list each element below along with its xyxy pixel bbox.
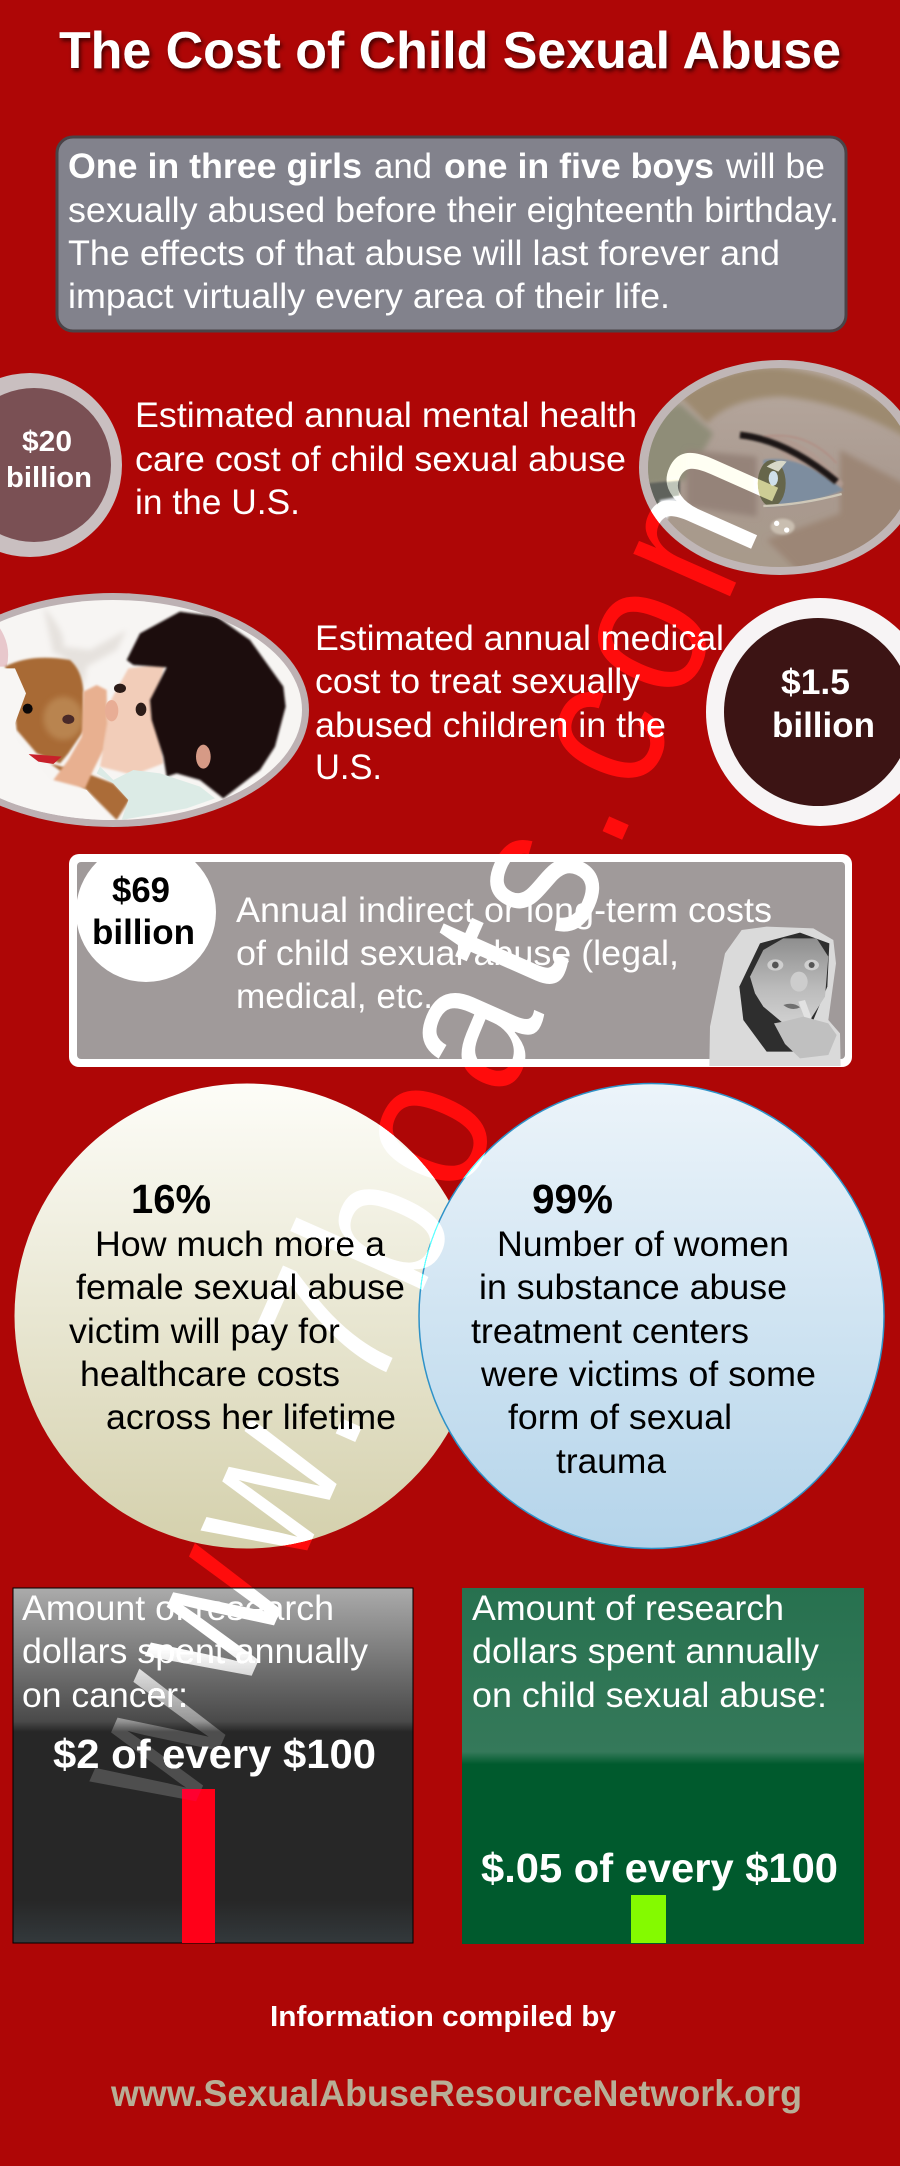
panel: cancer research dollars: [13, 1588, 413, 1943]
stat: $20 billion circle: [0, 373, 122, 557]
venn circle: 99%: in substance abuse: [479, 1268, 787, 1307]
panel: child sexual abuse research dollars: on child sexual abuse:: [472, 1676, 827, 1715]
stat: $1.5 billion circle: billion: [772, 706, 875, 745]
text: indirect cost: Annual indirect or long-term costs: [236, 891, 772, 930]
intro text: impact virtually every area of their life.: [68, 277, 670, 316]
venn circle: 16%: 16%: [131, 1176, 211, 1222]
venn circle: 99%: treatment centers: [471, 1312, 749, 1351]
intro text: [68, 147, 839, 316]
venn circle: 16%: [14, 1084, 480, 1548]
venn circle: 99%: 99%: [532, 1176, 613, 1222]
text: medical cost: abused children in the: [315, 706, 666, 745]
footer label: Information compiled by: [270, 2001, 616, 2033]
panel: intro statement: [57, 137, 846, 331]
text: mental health cost: in the U.S.: [135, 483, 300, 522]
venn circle: 16%: female sexual abuse: [76, 1268, 405, 1307]
intro text: will be: [725, 147, 825, 186]
text: mental health cost: care cost of child sexual abuse: [135, 440, 626, 479]
panel: cancer research dollars: dollars spent annually: [22, 1632, 368, 1671]
stat: $20 billion circle: $20: [22, 426, 72, 458]
intro text: One in three girls: [68, 147, 362, 186]
venn circle: 16%: How much more a: [95, 1225, 386, 1264]
text: medical cost: Estimated annual medical: [315, 619, 724, 658]
footer url: www.SexualAbuseResourceNetwork.org: [110, 2073, 802, 2114]
panel: cancer research dollars: $2 of every $100: [53, 1731, 376, 1777]
panel: child sexual abuse research dollars: dollars spent annually: [472, 1632, 819, 1671]
text: indirect cost: [236, 891, 772, 1016]
venn circle: 99%: Number of women: [497, 1225, 789, 1264]
intro text: The effects of that abuse will last forever and: [68, 234, 780, 273]
stat: $69 billion circle: [77, 862, 216, 982]
panel: cancer research dollars: Amount of research: [22, 1589, 334, 1628]
bar: child sexual abuse: [631, 1895, 666, 1943]
intro text: and: [374, 147, 432, 186]
watermark: www.7boats.com: [21, 391, 828, 1842]
stat: $1.5 billion circle: $1.5: [781, 663, 850, 702]
venn circle: 16%: healthcare costs: [80, 1355, 340, 1394]
text: medical cost: cost to treat sexually: [315, 662, 640, 701]
title: The Cost of Child Sexual Abuse: [59, 22, 841, 80]
panel: child sexual abuse research dollars: $.05 of every $100: [481, 1845, 838, 1891]
stat: $20 billion circle: billion: [6, 462, 92, 494]
text: mental health cost: [135, 396, 637, 522]
photo: child with finger to lips: [709, 927, 841, 1066]
intro text: one in five boys: [444, 147, 714, 186]
venn circle: 16%: across her lifetime: [106, 1398, 396, 1437]
panel: cancer research dollars: on cancer:: [22, 1676, 188, 1715]
venn circle: 99%: were victims of some: [480, 1355, 816, 1394]
text: indirect cost: of child sexual abuse (legal,: [236, 934, 679, 973]
venn circle: 99%: form of sexual: [508, 1398, 732, 1437]
venn circle: 99%: trauma: [556, 1442, 667, 1481]
venn circle: 16%: victim will pay for: [69, 1312, 340, 1351]
bar: cancer: [182, 1789, 215, 1943]
photo: child hugging teddy bear: [0, 590, 333, 830]
photo: crying eye: [633, 357, 900, 577]
intro text: sexually abused before their eighteenth birthday.: [68, 191, 839, 230]
text: medical cost: U.S.: [315, 748, 382, 787]
venn circle: 99%: [419, 1084, 884, 1548]
text: medical cost: [315, 619, 724, 787]
panel: indirect cost: [69, 842, 852, 1067]
stat: $69 billion circle: billion: [92, 913, 195, 952]
stat: $69 billion circle: $69: [112, 871, 170, 910]
panel: child sexual abuse research dollars: [462, 1588, 864, 1944]
panel: child sexual abuse research dollars: Amount of research: [472, 1589, 784, 1628]
text: indirect cost: medical, etc.: [236, 977, 433, 1016]
text: mental health cost: Estimated annual mental health: [135, 396, 637, 435]
stat: $1.5 billion circle: [706, 598, 900, 826]
